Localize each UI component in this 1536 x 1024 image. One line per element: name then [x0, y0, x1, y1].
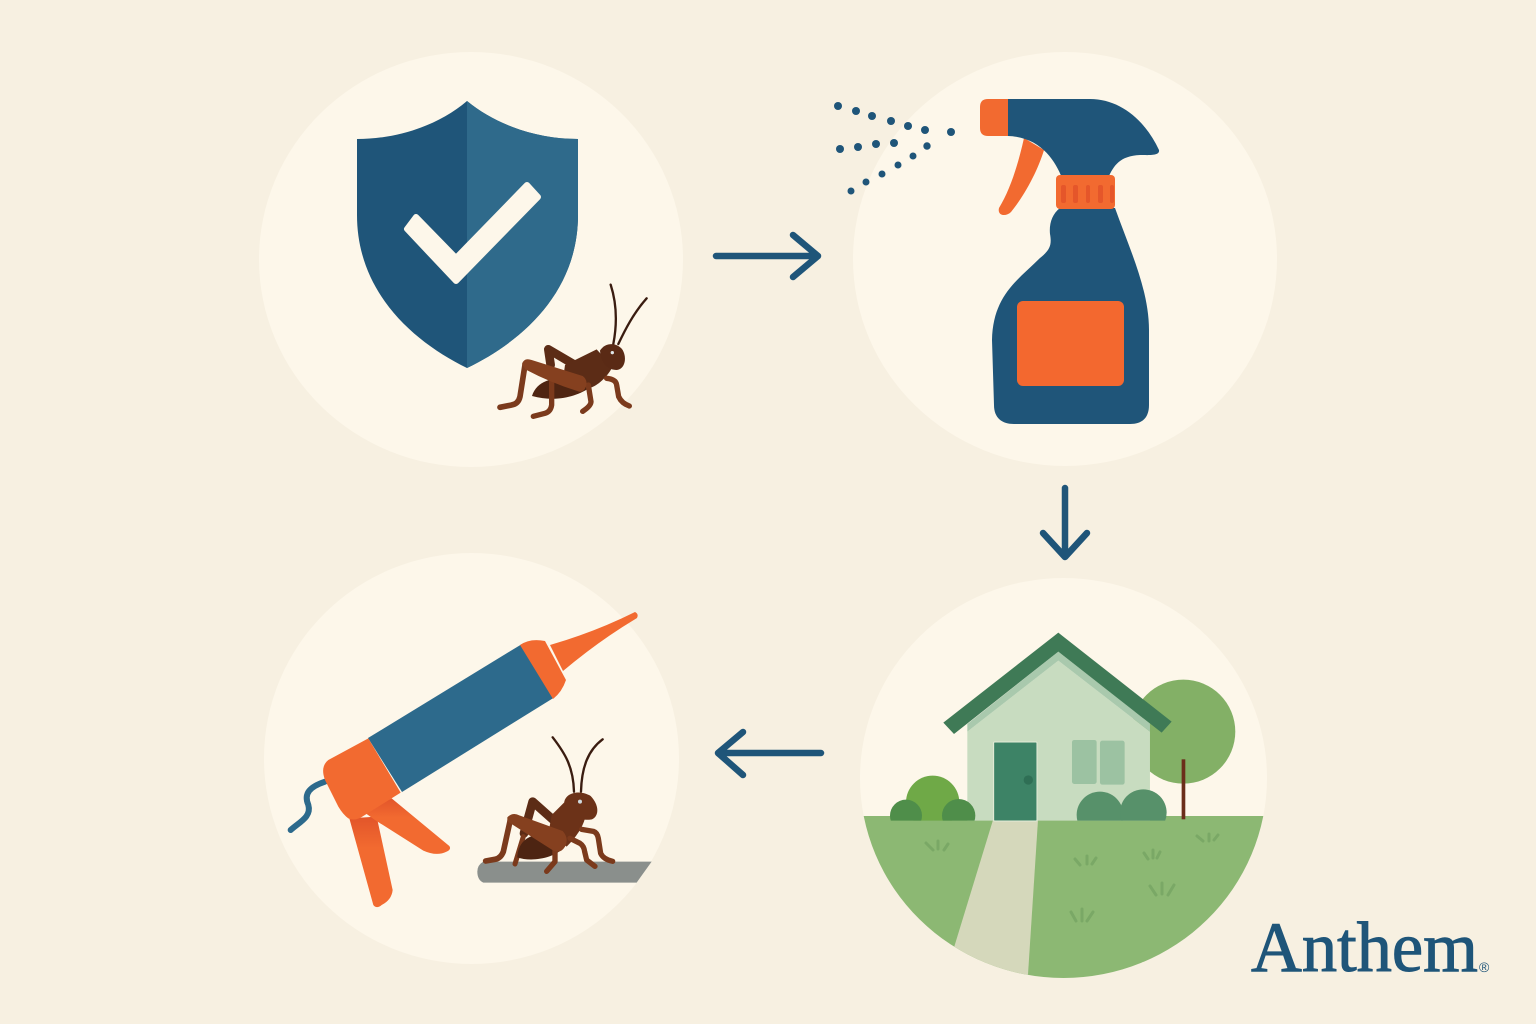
icon: spray mist dots — [834, 102, 955, 194]
icon: caulk gun — [291, 612, 638, 907]
infographic canvas — [259, 52, 1490, 978]
icon: cricket on gray ledge — [477, 737, 652, 883]
arrow: shield to spray — [716, 235, 818, 277]
panel: house and yard — [855, 578, 1275, 990]
icon: house with tree and shrubs — [890, 633, 1235, 838]
panel: caulk gun and cricket — [264, 553, 679, 964]
panel: spray bottle — [834, 52, 1277, 466]
arrow: spray to house — [1043, 488, 1087, 557]
arrow: house to caulk gun — [718, 732, 821, 775]
logo: Anthem wordmark: Anthem — [1251, 909, 1478, 987]
logo: Anthem wordmark: ® — [1479, 959, 1490, 975]
icon: cricket beside shield — [500, 285, 647, 416]
lawn and walkway — [864, 816, 1264, 978]
icon: shield with check mark — [357, 101, 578, 368]
panel: protection shield and cricket — [259, 52, 683, 467]
icon: spray bottle — [980, 99, 1159, 424]
